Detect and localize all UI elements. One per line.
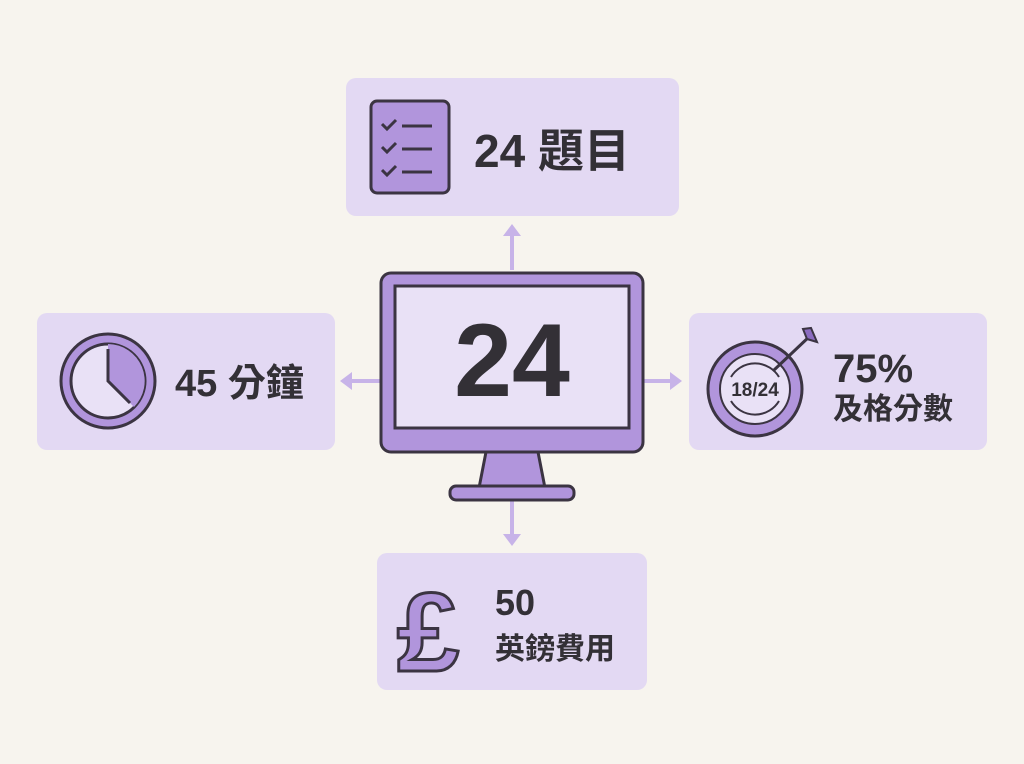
- text: 50 pounds fee: 50: [495, 582, 535, 623]
- panel: fee: [377, 553, 647, 690]
- text: 24 questions: 24 題目: [474, 125, 630, 177]
- monitor: 24: [454, 303, 570, 419]
- panel: time: [37, 313, 335, 450]
- icon: target: 18/24: [731, 380, 779, 401]
- panel: pass mark: [689, 313, 987, 450]
- panel: fee: 英鎊費用: [495, 633, 615, 666]
- icon: target: [706, 326, 819, 438]
- icon: clock: [60, 332, 156, 430]
- icon: checklist: [370, 100, 450, 194]
- text: 45 minutes: 45 分鐘: [175, 363, 304, 405]
- text: 75% pass: 75%: [833, 347, 913, 391]
- panel: questions: [346, 78, 679, 216]
- icon: pound: £: [397, 570, 459, 695]
- panel: pass mark: 及格分數: [833, 393, 953, 426]
